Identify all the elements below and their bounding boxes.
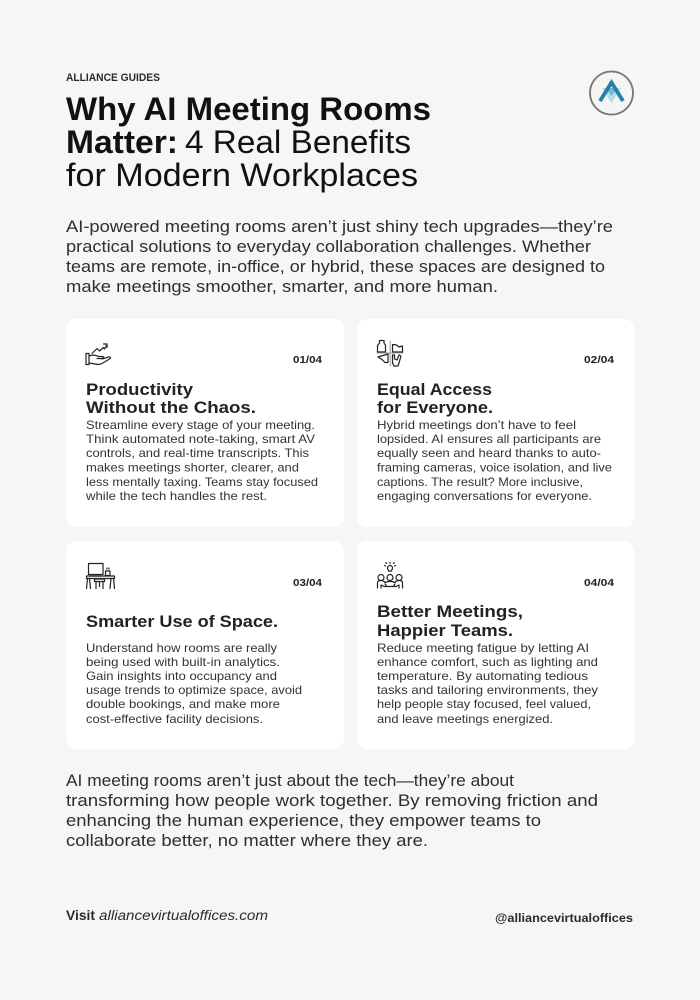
heading: Without the Chaos. [86, 398, 256, 417]
body text: being used with built-in analytics. [86, 656, 280, 669]
body text: Hybrid meetings don’t have to feel [377, 419, 576, 432]
website link: alliancevirtualoffices.com [99, 908, 268, 923]
closing paragraph: enhancing the human experience, they empower teams to [66, 811, 541, 830]
closing paragraph: collaborate better, no matter where they are. [66, 831, 428, 850]
title: 4 Real Benefits [185, 124, 411, 160]
body text: help people stay focused, feel valued, [377, 698, 591, 711]
body text: and leave meetings energized. [377, 713, 553, 726]
heading: Happier Teams. [377, 621, 513, 640]
body text: cost-effective facility decisions. [86, 713, 263, 726]
body text: controls, and real-time transcripts. This [86, 447, 309, 460]
intro paragraph: teams are remote, in-office, or hybrid, these spaces are designed to [66, 257, 605, 276]
logo [590, 72, 633, 114]
body text: makes meetings shorter, clearer, and [86, 462, 299, 474]
body text: lopsided. AI ensures all participants are [377, 433, 601, 446]
heading [86, 380, 256, 417]
heading: for Everyone. [377, 398, 493, 417]
icon: desk with monitor [86, 564, 114, 588]
body text [86, 642, 302, 726]
intro paragraph: practical solutions to everyday collaboration challenges. Whether [66, 237, 592, 256]
body text: Reduce meeting fatigue by letting AI [377, 642, 589, 655]
heading: Equal Access [377, 380, 492, 399]
body text: enhance comfort, such as lighting and [377, 656, 598, 669]
body text: framing cameras, voice isolation, and live [377, 462, 612, 474]
page number: 04/04 [584, 578, 614, 589]
body text: Think automated note-taking, smart AV [86, 433, 315, 446]
panel: equal access [357, 319, 634, 527]
body text: usage trends to optimize space, avoid [86, 684, 302, 697]
title: Matter: [66, 124, 178, 160]
website link: Visit [66, 908, 96, 923]
heading: Smarter Use of Space. [86, 612, 278, 631]
heading: Productivity [86, 380, 194, 399]
body text: engaging conversations for everyone. [377, 490, 592, 503]
intro paragraph [66, 217, 613, 296]
page number: 01/04 [293, 355, 322, 366]
panel: better meetings [357, 541, 634, 749]
body text: captions. The result? More inclusive, [377, 476, 583, 489]
title [66, 91, 431, 193]
intro paragraph: AI-powered meeting rooms aren’t just shiny tech upgrades—they’re [66, 217, 613, 236]
title: for Modern Workplaces [66, 157, 418, 193]
body text [377, 642, 598, 726]
body text [377, 419, 612, 503]
body text: double bookings, and make more [86, 698, 280, 711]
social handle: @alliancevirtualoffices [495, 911, 633, 925]
panel: smarter use of space [66, 541, 344, 749]
body text: temperature. By automating tedious [377, 670, 588, 683]
body text: Gain insights into occupancy and [86, 670, 277, 683]
body text: equally seen and heard thanks to auto- [377, 447, 601, 460]
body text: Understand how rooms are really [86, 642, 277, 655]
closing paragraph [66, 771, 598, 850]
page number: 02/04 [584, 355, 614, 366]
body text: tasks and tailoring environments, they [377, 684, 598, 697]
icon: team with lightbulb [378, 562, 402, 588]
body text: while the tech handles the rest. [85, 490, 267, 503]
heading [377, 380, 493, 417]
icon: hand with rising arrow [86, 344, 110, 364]
body text: less mentally taxing. Teams stay focused [86, 476, 318, 489]
heading [377, 602, 523, 640]
closing paragraph: transforming how people work together. By removing friction and [66, 791, 598, 810]
heading: Better Meetings, [377, 602, 523, 621]
title: Why AI Meeting Rooms [66, 91, 431, 127]
icon: four video participants [377, 340, 403, 366]
closing paragraph: AI meeting rooms aren’t just about the tech—they’re about [66, 771, 514, 790]
brand label: ALLIANCE GUIDES [66, 72, 160, 84]
body text: Streamline every stage of your meeting. [86, 419, 315, 432]
panel: productivity [66, 319, 344, 527]
body text [85, 419, 318, 503]
intro paragraph: make meetings smoother, smarter, and more human. [66, 277, 498, 296]
page number: 03/04 [293, 578, 322, 589]
